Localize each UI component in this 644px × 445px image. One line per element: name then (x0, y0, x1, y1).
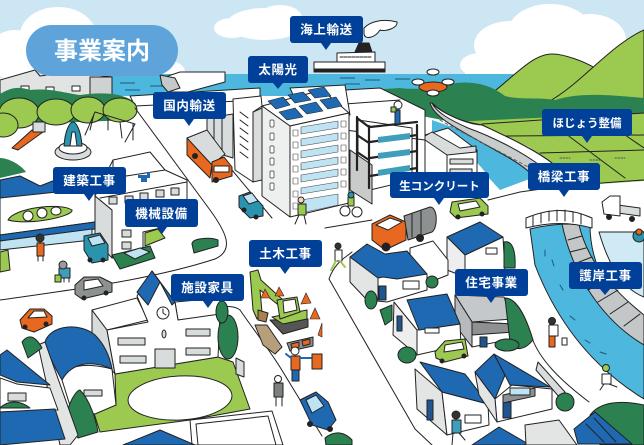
lighthouse tower (412, 69, 454, 96)
label: 施設家具 (171, 274, 244, 308)
walking man in suit (274, 376, 283, 406)
house five (475, 354, 552, 422)
label: 生コンクリート (390, 172, 489, 205)
label: 海上輸送 (290, 16, 363, 50)
label: 太陽光: 太陽光 (258, 62, 298, 77)
coastal road and breakwater (130, 72, 260, 106)
forest (340, 82, 644, 126)
label: 建築工事 (53, 167, 126, 201)
park playground (0, 112, 135, 178)
label: 建築工事: 建築工事 (63, 173, 116, 188)
label: ほじょう整備 (542, 109, 632, 143)
house three (380, 294, 461, 363)
label: 国内輸送: 国内輸送 (163, 98, 216, 113)
park trees (0, 88, 137, 137)
left factory (0, 70, 112, 100)
label: 施設家具: 施設家具 (181, 280, 234, 295)
main road lines (329, 180, 644, 445)
label: 護岸工事 (569, 262, 642, 295)
cyclist (340, 192, 362, 217)
house one (350, 244, 438, 309)
orange car (20, 309, 52, 332)
left houses (0, 337, 78, 445)
jogger (600, 364, 617, 390)
worker on roof (391, 101, 402, 124)
pedestrian (295, 197, 306, 224)
bottom right forest and roofs (472, 402, 644, 445)
bridge (526, 210, 592, 228)
gray house (455, 295, 514, 347)
roads (0, 108, 372, 436)
sky (0, 0, 644, 78)
label: 橋梁工事: 橋梁工事 (538, 169, 590, 184)
woman with bag (36, 234, 44, 261)
concrete mixer truck (372, 207, 436, 251)
label: 土木工事 (249, 240, 322, 274)
school (92, 271, 250, 432)
field: farmland (450, 113, 644, 184)
sea waves (120, 78, 410, 90)
label: 太陽光 (248, 56, 308, 89)
pedestrians on river path (548, 318, 567, 347)
label: 住宅事業 (455, 269, 528, 303)
label: 護岸工事: 護岸工事 (579, 268, 632, 283)
rubble pile (255, 325, 313, 354)
label: 国内輸送 (153, 92, 226, 126)
house four (415, 362, 489, 435)
shop windows car (0, 229, 218, 272)
elderly person with cart (55, 261, 70, 282)
garage shed (410, 241, 448, 282)
label: 橋梁工事 (528, 163, 600, 197)
upper river with embankment (430, 103, 552, 190)
field worker (633, 229, 644, 242)
label: 海上輸送: 海上輸送 (300, 22, 353, 37)
flagman worker (286, 347, 322, 381)
fence and tree (536, 362, 574, 411)
sea (110, 74, 520, 96)
gray car (75, 277, 112, 300)
runner at road (331, 243, 345, 270)
bushes (505, 298, 533, 349)
fountain (55, 122, 91, 160)
excavator (250, 270, 308, 334)
back white buildings (290, 85, 425, 140)
lower river (530, 224, 644, 399)
label: 土木工事: 土木工事 (259, 246, 312, 261)
label: 生コンクリート: 生コンクリート (399, 179, 480, 193)
delivery truck (187, 130, 232, 182)
title badge (26, 25, 178, 76)
label: 住宅事業: 住宅事業 (465, 275, 518, 290)
traffic cones (261, 287, 322, 337)
side windows (270, 120, 274, 190)
slide (12, 122, 45, 150)
building under construction (350, 101, 417, 204)
clouds (0, 4, 640, 84)
label: 機械設備 (125, 199, 198, 234)
label: ほじょう整備: ほじょう整備 (552, 116, 622, 130)
woman in green (452, 411, 465, 445)
ship (314, 20, 397, 72)
hills (480, 30, 644, 104)
school trees (216, 301, 244, 377)
clinic building with cross (95, 152, 187, 258)
label: 機械設備: 機械設備 (135, 206, 188, 221)
title badge: 事業案内 (54, 38, 150, 65)
back house (447, 222, 515, 277)
blue car (239, 192, 263, 219)
solar panels (268, 87, 342, 120)
residential houses (350, 222, 574, 435)
green car (435, 339, 468, 363)
gym (45, 327, 116, 438)
clinic garden (112, 246, 155, 269)
hedge (0, 158, 26, 178)
small white truck (602, 196, 640, 222)
windows (293, 121, 346, 213)
swings (85, 112, 135, 142)
bottom buildings (123, 411, 352, 445)
left shop roof (0, 175, 95, 250)
back slab buildings (207, 96, 262, 182)
white building right of frame (425, 128, 477, 190)
blue sedan (300, 392, 336, 432)
main office building (262, 87, 349, 217)
green van (450, 198, 488, 219)
